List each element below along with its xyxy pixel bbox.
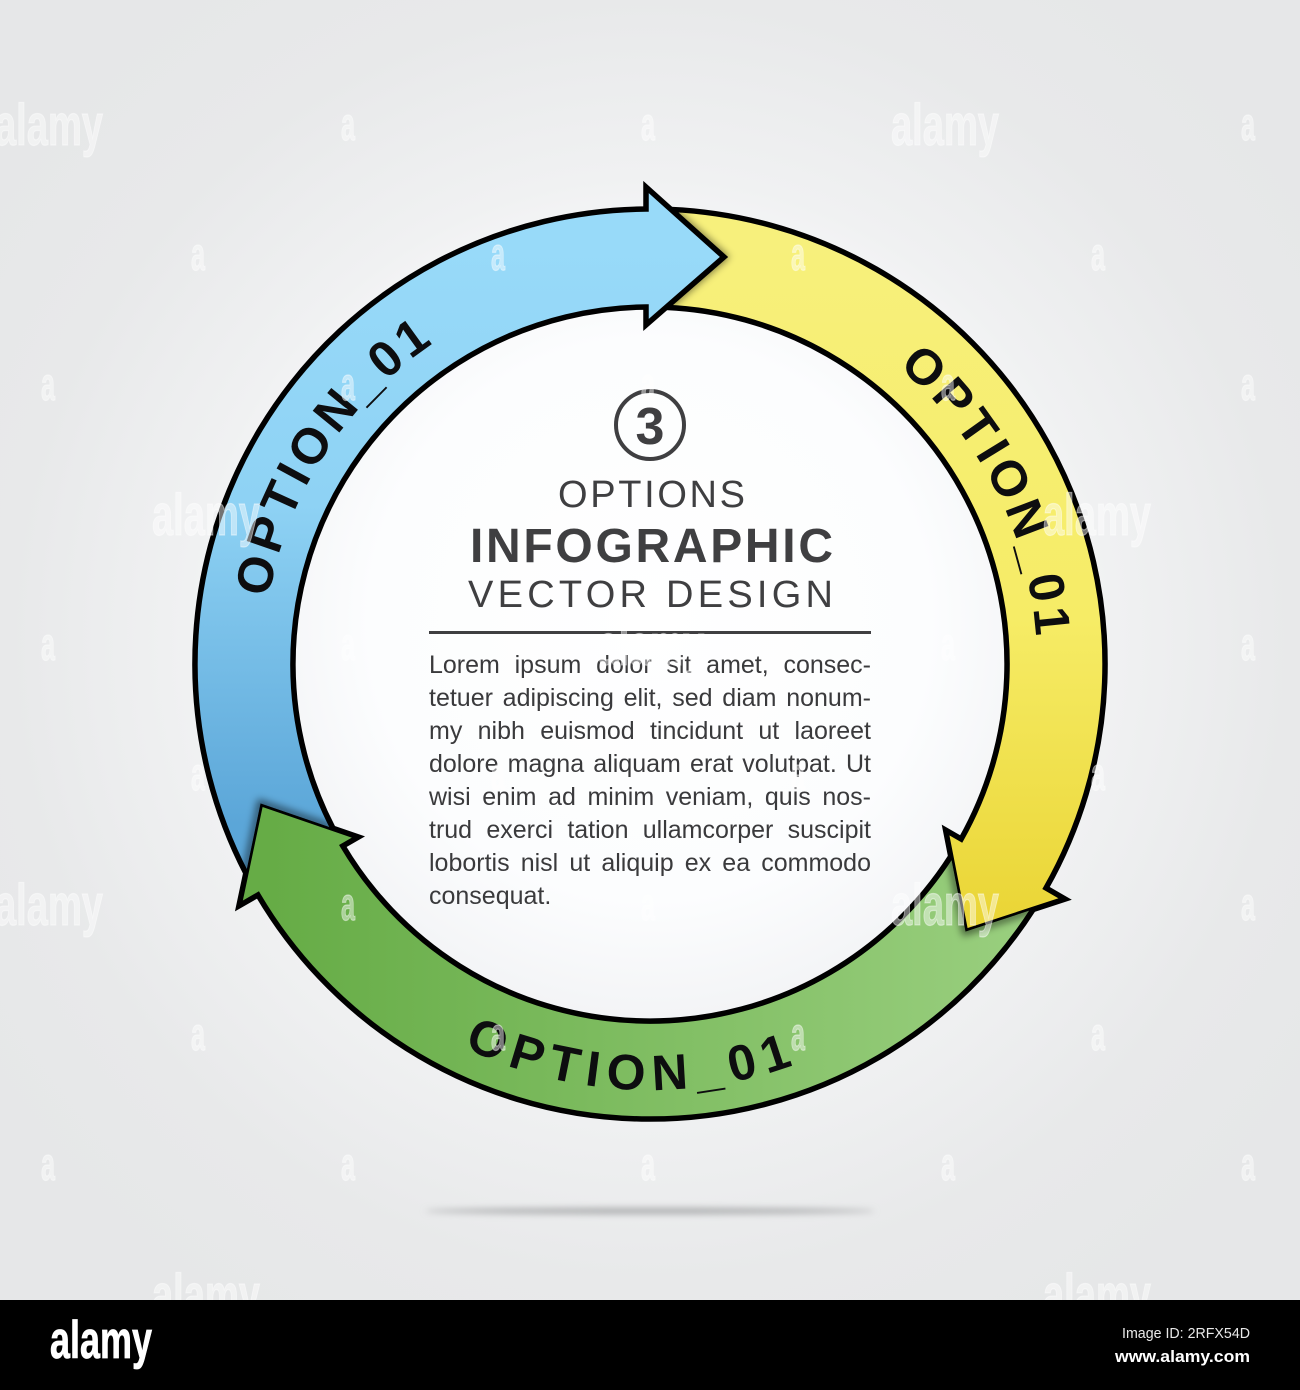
body paragraph: tetuer adipiscing elit, sed diam nonum- [429, 684, 871, 712]
watermark overlay: a [1091, 228, 1105, 280]
arrow: blue option [195, 187, 724, 873]
watermark overlay: a [791, 1008, 805, 1060]
watermark overlay: a [641, 358, 655, 410]
watermark overlay: a [941, 358, 955, 410]
body paragraph: Lorem ipsum dolor sit amet, consec- [429, 651, 871, 679]
watermark overlay: a [941, 1138, 955, 1190]
divider line [429, 631, 871, 634]
watermark overlay: a [641, 98, 655, 150]
watermark overlay: alamy [1043, 483, 1151, 548]
watermark overlay: a [341, 98, 355, 150]
watermark overlay: a [1241, 618, 1255, 670]
yellow arrow label: OPTION_01 [906, 348, 1070, 635]
watermark overlay: a [41, 618, 55, 670]
body paragraph: wisi enim ad minim veniam, quis nos- [429, 783, 871, 811]
watermark overlay: a [791, 748, 805, 800]
body paragraph: consequat. [429, 882, 551, 910]
body paragraph: lobortis nisl ut aliquip ex ea commodo [429, 849, 871, 877]
watermark overlay: a [341, 1138, 355, 1190]
watermark overlay: a [341, 878, 355, 930]
watermark overlay: a [191, 228, 205, 280]
body paragraph [429, 651, 871, 910]
watermark overlay: a [191, 1008, 205, 1060]
watermark overlay: a [341, 618, 355, 670]
heading: infographic: INFOGRAPHIC [470, 520, 833, 573]
arrow: green option [235, 803, 1035, 1122]
body paragraph: dolore magna aliquam erat volutpat. Ut [429, 750, 871, 778]
footer bar [0, 1300, 1300, 1390]
floor shadow [425, 1208, 875, 1214]
green arrow label: OPTION_01 [470, 1021, 792, 1094]
watermark overlay: a [791, 228, 805, 280]
watermark overlay: a [1241, 878, 1255, 930]
watermark overlay: a [941, 618, 955, 670]
watermark overlay: alamy [598, 613, 704, 678]
watermark overlay: alamy [891, 873, 999, 938]
watermark overlay: a [491, 228, 505, 280]
watermark overlay: a [1241, 1138, 1255, 1190]
arrow: yellow option [667, 206, 1108, 932]
watermark overlay: a [341, 358, 355, 410]
body paragraph: my nibh euismod tincidunt ut laoreet [429, 717, 871, 745]
heading: options: OPTIONS [558, 474, 745, 516]
watermark overlay: a [491, 1008, 505, 1060]
blue arrow label: OPTION_01 [238, 320, 432, 592]
icon: number 3 badge: 3 [636, 398, 664, 456]
watermark overlay: a [41, 358, 55, 410]
footer bar: alamy [50, 1311, 152, 1370]
watermark overlay: a [1241, 98, 1255, 150]
footer bar: Image ID: 2RFX54D [1122, 1325, 1250, 1342]
footer bar: www.alamy.com [1114, 1347, 1250, 1366]
watermark overlay: a [41, 1138, 55, 1190]
watermark overlay: a [641, 878, 655, 930]
watermark overlay: alamy [152, 483, 260, 548]
watermark overlay: a [491, 748, 505, 800]
watermark overlay: a [191, 748, 205, 800]
body paragraph: trud exerci tation ullamcorper suscipit [429, 816, 871, 844]
watermark overlay: a [1091, 1008, 1105, 1060]
heading: vector design: VECTOR DESIGN [468, 574, 833, 616]
watermark overlay: a [1241, 358, 1255, 410]
icon: number 3 badge [616, 391, 684, 459]
inner white circle [292, 306, 1008, 1022]
watermark overlay: a [641, 1138, 655, 1190]
watermark overlay: a [1091, 748, 1105, 800]
watermark overlay: alamy [891, 93, 999, 158]
